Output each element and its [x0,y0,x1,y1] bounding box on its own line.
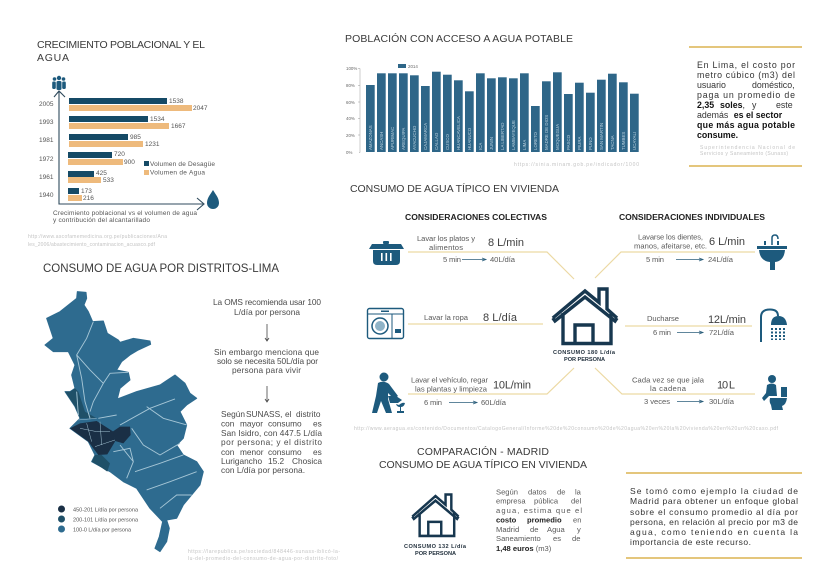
icon: pot [369,241,404,265]
icon: shower [761,310,787,342]
bar chart: volumen de desagüe y agua: 985 [130,134,141,141]
bar chart: acceso por región: ICA [478,143,483,150]
item: jalar cadena [632,376,735,406]
callout: costo en Lima: Servicios y Saneamiento (Sunass) [700,151,788,157]
text: SUNASS: con [221,418,235,428]
text: OMS: La OMS recomienda usar 100 [213,297,321,307]
bar chart: acceso por región: SAN MARTIN [599,123,604,150]
bar chart: acceso por región: JUNIN [489,137,494,150]
text: OMS: L/día por persona [234,307,300,317]
bar chart: volumen de desagüe y agua: 720 [114,151,125,158]
item: lavar ropa: Lavar la ropa [424,313,469,322]
text: SUNASS: consumo [268,447,302,457]
text: costo promedio: 1,48 euros (m3) [496,544,552,553]
source url [188,549,340,562]
item: lavarse dientes: 5 min [646,255,664,264]
bar chart: acceso por región: CALLAO [434,132,439,150]
bar chart: volumen de desagüe y agua: 1981 [39,137,54,144]
text: SUNASS: 15.2 [268,456,285,466]
arrow [265,386,269,402]
heading: colectivas: CONSIDERACIONES COLECTIVAS [405,212,547,222]
text: SUNASS: menor [240,447,264,457]
bar chart: volumen de desagüe y agua: 425 [96,170,107,177]
text: costo promedio: de [530,525,538,534]
bar chart: acceso por región: AYACUCHO [412,125,417,150]
text: costo promedio [496,488,582,553]
heading: individuales: CONSIDERACIONES INDIVIDUALES [619,212,765,222]
text: costo promedio: pública [534,496,559,506]
label: consumo 180: CONSUMO 180 L/día [553,350,616,356]
bar chart: volumen de desagüe y agua: 1940 [39,192,54,199]
bar chart: volumen de desagüe y agua: 2005 [39,101,54,108]
text: SUNASS [221,409,322,475]
bar chart: acceso por región: CAJAMARCA [423,123,428,150]
source url: les_2006/abastecimiento_contaminacion_acuasco.pdf [28,242,156,248]
bar chart: acceso por región: 80% [346,83,355,88]
arrow [265,324,269,341]
text: SUNASS: mayor [240,418,263,428]
callout: costo en Lima [689,47,802,166]
callout: costo en Lima: soles [720,100,743,110]
panel: comparación Madrid [379,445,802,558]
bar chart: acceso por región: UCAYALI [632,132,637,150]
item: lavar vehiculo: las plantas y limpieza [415,384,488,394]
connector lines [408,252,755,394]
text: 50 L: persona para vivir [232,365,301,375]
callout: Madrid: importancia de este recurso. [630,537,751,547]
item: ducharse [647,314,746,337]
bar chart: acceso por región: PUNO [588,137,593,150]
item: lavarse dientes [634,232,745,264]
callout: costo en Lima: y [752,100,757,110]
item: lavar vehiculo [411,376,531,407]
title: consumo típico: CONSUMO DE AGUA TÍPICO EN VIVIENDA [350,182,559,195]
legend: map [58,506,139,534]
text: costo promedio: promedio [527,516,562,524]
callout: costo en Lima: usuario [697,80,726,90]
bar chart: acceso por región: 60% [346,100,355,105]
icon: toilet [762,375,787,410]
bar chart: acceso por región: 100% [346,66,357,71]
source url: http://www.ascofamemedicina.org.pe/publicaciones/Ana [28,234,167,240]
item: jalar cadena: Cada vez se que jala [632,376,705,384]
item: lavar ropa: 8 L/día [483,312,518,324]
bar chart: volumen de desagüe y agua: 1993 [39,119,54,126]
item: lavar platos: 8 L/min [488,237,524,249]
text: costo promedio: empresa [496,496,526,506]
label: consumo 132: CONSUMO 132 L/día [404,544,467,550]
bar chart: acceso por región: APURIMAC [390,127,395,150]
bar chart: acceso por región: LORETO [533,131,538,150]
legend: map: 450-201 L/día por persona [73,508,139,514]
bar chart: acceso por región: HUANCAVELICA [456,116,461,150]
legend: map: 100-0 L/día por persona [73,528,132,534]
bar chart: acceso por región: 2014 [408,64,418,69]
callout: costo en Lima: consume. [697,130,738,140]
icon: house [553,289,617,344]
item: lavar platos: 5 min [443,255,461,264]
icon: person watering [372,372,405,413]
item: ducharse: 6 min [653,328,671,337]
panel: acceso a agua potable [345,32,639,168]
text: costo promedio: Madrid [496,525,519,534]
text: 50 L: Sin embargo menciona que [214,347,319,357]
callout: costo en Lima: además es el sector [697,110,783,120]
text: SUNASS: con [221,447,235,457]
bar chart: acceso por región: 40% [346,116,355,121]
text: SUNASS: es [313,418,322,428]
text: costo promedio: Saneamiento [496,534,541,543]
bar chart: acceso por región: CUSCO [445,134,450,150]
panel: consumo en vivienda [350,182,787,432]
legend: volumen: Volumen de Agua [150,170,205,176]
callout: Madrid [626,473,802,558]
callout: costo en Lima: En Lima, el costo por [697,60,795,70]
callout: costo en Lima: paga un promedio de [697,90,795,100]
item: lavar platos: 40L/día [490,255,516,264]
item: lavarse dientes: 6 L/min [709,236,745,248]
callout: costo en Lima: Superintendencia Nacional de [700,145,795,151]
bar chart: volumen de desagüe y agua: 216 [83,195,94,202]
text: SUNASS: Lurigancho [221,456,262,466]
title: crecimiento poblacional: CRECIMIENTO POBLACIONAL Y EL [37,39,205,51]
item: jalar cadena: 30L/día [709,397,735,406]
text: SUNASS: es [313,447,322,457]
callout: Madrid: persona, en relación al precio por m3 de [630,517,798,527]
text: 50 L: solo se necesita 50L/día por [217,356,318,366]
callout: Madrid: Se tomó como ejemplo la ciudad de [630,486,798,496]
caption: y contribución del alcantarillado [53,217,150,224]
bar chart: acceso por región: 20% [346,133,355,138]
callout: costo en Lima: metro cúbico (m3) del [697,70,795,80]
icon: washing machine [368,308,404,338]
source url: https://larepublica.pe/sociedad/848446-sunass-iblicó-la- [188,549,340,555]
icon: people [52,76,66,90]
panel: consumo por distritos [43,263,340,562]
item: ducharse: Ducharse [647,314,679,323]
bar chart: volumen de desagüe y agua: 173 [81,188,92,195]
title: comparación [379,445,587,471]
title: crecimiento poblacional: AGUA [37,52,69,64]
source url: https://sinia.minam.gob.pe/indicador/1000 [514,162,639,168]
source url: lu-del-promedio-del-consumo-de-agua-por-distrito-foto/ [188,556,339,562]
text: SUNASS: distrito [296,409,321,419]
icon: water drop [207,190,219,209]
label: consumo 132: POR PERSONA [415,551,456,557]
item: jalar cadena: la cadena [650,384,687,393]
text: SUNASS: el [285,409,292,419]
bar chart: volumen de desagüe y agua: 1534 [150,116,165,123]
item: ducharse: 72L/día [709,328,735,337]
item: jalar cadena: 10 L [717,380,735,392]
text: SUNASS: San Isidro, con 447.5 L/día [221,428,322,438]
source url [28,234,167,248]
text: SUNASS: con L/día por persona. [221,465,305,475]
bar chart: acceso por región: PASCO [566,134,571,150]
bar chart: volumen de desagüe y agua [39,91,208,210]
item: lavar vehiculo: 60L/día [481,398,507,407]
item: lavar ropa [424,312,518,324]
icon: sink [757,235,787,270]
bar chart: acceso por región: AMAZONAS [368,125,373,150]
text: costo promedio: del [571,496,581,506]
label: consumo 180 [553,350,616,363]
icon: house [412,495,459,536]
map: Lima [45,292,203,552]
bar chart: acceso por región: LAMBAYEQUE [511,120,516,150]
bar chart: acceso por región: 0% [346,150,352,155]
callout: costo en Lima: doméstico, [752,80,795,90]
label: consumo 132 [404,544,467,557]
bar chart: acceso por región: HUANUCO [467,127,472,150]
item: lavar vehiculo: 10L/min [493,380,531,392]
text: costo promedio: Agua [547,525,566,534]
item: lavar vehiculo: 6 min [424,398,442,407]
bar chart: acceso por región: AREQUIPA [401,128,406,150]
item: lavarse dientes: 24L/día [708,255,734,264]
title: comparación: COMPARACIÓN - MADRID [417,445,549,458]
caption: Crecimiento poblacional vs el volumen de agua [53,210,197,217]
label: consumo 180: POR PERSONA [564,357,605,363]
text: costo promedio: datos [528,488,547,496]
caption [53,210,197,224]
callout: costo en Lima: este [776,100,793,110]
bar chart: volumen de desagüe y agua: 1231 [145,141,160,148]
item: lavar vehiculo: Lavar el vehículo, regar [411,376,488,384]
bar chart: acceso por región: LIMA [522,140,527,150]
text: SUNASS: Según [221,409,245,419]
legend: volumen: Volumen de Desagüe [150,161,215,168]
bar chart: acceso por región: MADRE DE DIOS [544,115,549,150]
text: costo promedio: Según [496,488,518,496]
title: población con acceso: POBLACIÓN CON ACCESO A AGUA POTABLE [345,32,573,45]
callout: Madrid: sobre el consumo promedio al día por [630,507,798,517]
text: costo promedio: costo [496,516,517,524]
text: SUNASS: por persona; y el distrito [221,437,322,447]
callout: costo en Lima: que más agua potable [697,120,795,130]
item: lavarse dientes: Lavarse los dientes, [638,232,703,242]
bar chart: volumen de desagüe y agua: 533 [103,177,114,184]
bar chart: acceso por región [346,64,639,155]
bar chart: acceso por región: TACNA [610,135,615,150]
bar chart: volumen de desagüe y agua: 1538 [169,98,184,105]
text: costo promedio: de [557,488,565,496]
bar chart: acceso por región: TUMBES [621,132,626,150]
item: lavarse dientes: manos, afeitarse, etc. [634,242,707,250]
legend: volumen [144,161,215,176]
bar chart: acceso por región: LA LIBERTAD [500,123,505,150]
bar chart: volumen de desagüe y agua: 1972 [39,156,54,163]
bar chart: acceso por región: MOQUEGUA [555,124,560,150]
text: 50 L [214,347,319,375]
bar chart: acceso por región: ANCASH [379,132,384,150]
text: SUNASS: consumo [268,418,302,428]
text: costo promedio: es [553,534,561,543]
text: costo promedio: y [577,525,581,534]
text: SUNASS: SUNASS, [246,409,282,419]
text: costo promedio: de [572,534,580,543]
callout: Madrid: Madrid para obtener un enfoque global [630,496,798,506]
text: costo promedio: en [573,516,581,524]
title: distritos Lima: CONSUMO DE AGUA POR DISTRITOS-LIMA [43,263,279,275]
bar chart: acceso por región: PIURA [577,137,582,150]
item: jalar cadena: 3 veces [644,397,670,406]
item: lavar platos: alimentos [429,243,463,252]
title: crecimiento poblacional [37,39,205,64]
bar chart: volumen de desagüe y agua: 1667 [171,123,186,130]
title: comparación: CONSUMO DE AGUA TÍPICO EN VIVIENDA [379,458,587,471]
text: SUNASS: Chosica [292,456,322,466]
bar chart: volumen de desagüe y agua: 900 [124,159,135,166]
text: costo promedio: agua, estima que el [496,506,582,515]
callout: costo en Lima: 2,35 [697,100,714,110]
panel: crecimiento poblacional [28,39,219,248]
bar chart: volumen de desagüe y agua: 1961 [39,174,54,181]
item: lavar platos [417,234,524,264]
source url: http://www.aeragua.es/contenido/Documentos/CatalogoGeneral/Informe%20de%20consumo%20de%20agua%20en%20la%20vivienda%20en%20un%20caso.pdf [354,426,779,432]
callout: Madrid: agua, como teniendo en cuenta la [630,527,798,537]
bar chart: volumen de desagüe y agua: 2047 [193,105,208,112]
callout: costo en Lima: , [742,100,745,110]
item: lavar platos: Lavar los platos y [417,234,475,243]
legend: map: 200-101 L/día por persona [73,518,139,524]
text: costo promedio: la [575,488,582,496]
item: ducharse: 12L/min [708,314,746,326]
text: OMS [213,297,321,317]
